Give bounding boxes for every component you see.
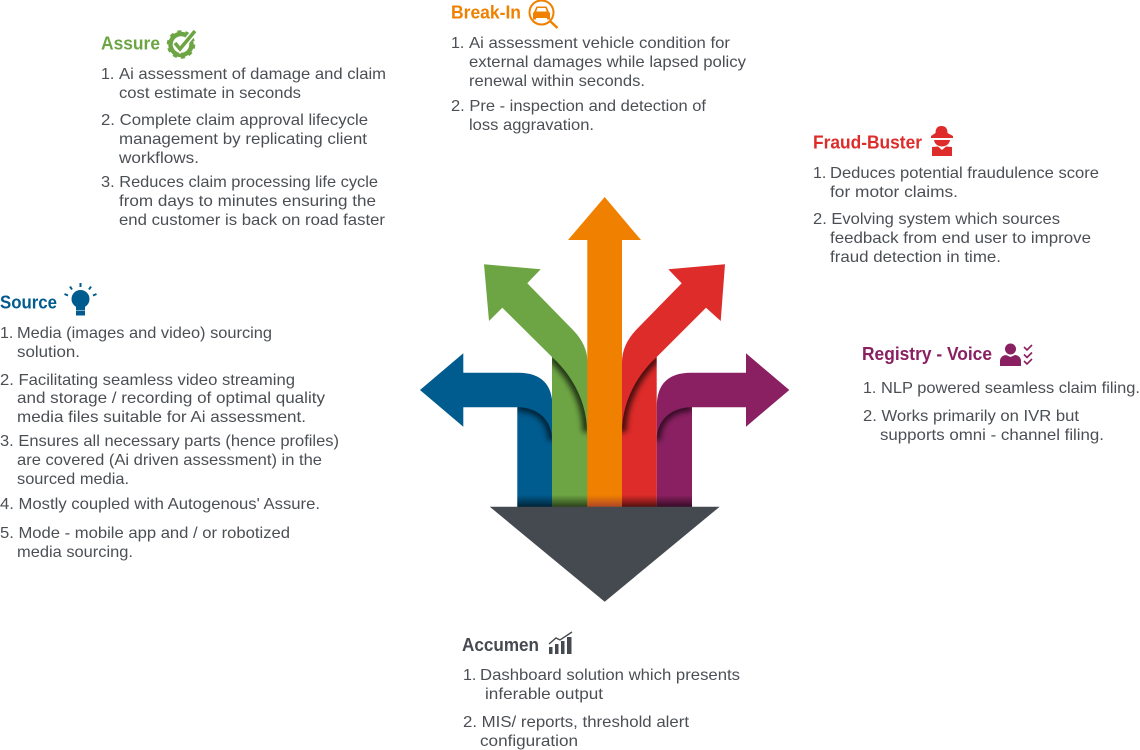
- arrow: orange, up: [568, 197, 641, 507]
- central arrows diagram: [420, 197, 789, 602]
- text block: Accumen list: inferable output: [485, 686, 604, 703]
- text block: Fraud-Buster list: 2. Evolving system which sources: [813, 211, 1060, 228]
- icon: magnifier with car: [530, 0, 558, 28]
- icon: light bulb: [64, 283, 96, 316]
- text block: Fraud-Buster list: feedback from end user to improve: [830, 230, 1091, 247]
- text block: Source list: [0, 325, 339, 561]
- heading: Assure: Assure: [101, 34, 160, 54]
- heading: Accumen: Accumen: [462, 635, 539, 655]
- text block: Break-In list: loss aggravation.: [469, 117, 594, 134]
- text block: Break-In list: renewal within seconds.: [469, 73, 645, 90]
- text block: Break-In list: 1.: [451, 35, 464, 52]
- icon: person with checklist: [1000, 344, 1032, 366]
- text block: Accumen list: [463, 667, 740, 750]
- text block: Source list: are covered (Ai driven assessment) in the: [17, 452, 322, 469]
- text block: Assure list: [101, 66, 386, 229]
- text block: Assure list: Ai assessment of damage and claim: [119, 66, 386, 83]
- text block: Source list: and storage / recording of optimal quality: [17, 390, 325, 407]
- heading: Break-In: Break-In: [451, 2, 521, 22]
- text block: Source list: 5. Mode - mobile app and / or robotized: [0, 525, 290, 542]
- icon: gear with check: [168, 31, 195, 57]
- text block: Break-In list: 2. Pre - inspection and detection of: [451, 98, 707, 115]
- panel: Source: [0, 283, 339, 561]
- text block: Break-In list: Ai assessment vehicle condition for: [469, 35, 731, 52]
- text block: Fraud-Buster list: fraud detection in time.: [830, 249, 1001, 266]
- text block: Accumen list: 1.: [463, 667, 476, 684]
- text block: Registry - Voice list: [863, 380, 1140, 444]
- text block: Fraud-Buster list: for motor claims.: [830, 184, 958, 201]
- text block: Fraud-Buster list: Deduces potential fraudulence score: [830, 165, 1099, 182]
- text block: Source list: 3. Ensures all necessary parts (hence profiles): [0, 433, 339, 450]
- fold shadows: [517, 357, 692, 440]
- text block: Registry - Voice list: NLP powered seamless claim filing.: [881, 380, 1140, 397]
- panel: Fraud-Buster: [813, 126, 1099, 266]
- panel: Accumen: [462, 632, 740, 750]
- text block: Source list: 4. Mostly coupled with Autogenous' Assure.: [0, 496, 320, 513]
- text block: Break-In list: [451, 35, 746, 134]
- text block: Fraud-Buster list: [813, 165, 1099, 266]
- arrow: green, up-left: [484, 264, 588, 507]
- arrow: purple, right: [657, 353, 789, 507]
- heading: Registry - Voice: Registry - Voice: [862, 344, 992, 364]
- text block: Break-In list: external damages while lapsed policy: [469, 54, 746, 71]
- base shading: [517, 495, 692, 507]
- text block: Assure list: 1.: [101, 66, 114, 83]
- panel: Registry - Voice: [862, 344, 1140, 444]
- text block: Registry - Voice list: 2. Works primarily on IVR but: [863, 408, 1080, 425]
- panel: Break-In: [451, 0, 746, 134]
- text block: Source list: 1.: [0, 325, 13, 342]
- base triangle: [490, 507, 720, 602]
- text block: Assure list: cost estimate in seconds: [119, 85, 301, 102]
- text block: Accumen list: configuration: [480, 733, 578, 750]
- text block: Source list: sourced media.: [17, 471, 129, 488]
- text block: Assure list: 2. Complete claim approval lifecycle: [101, 112, 368, 129]
- heading: Source: Source: [0, 292, 57, 312]
- text block: Assure list: 3. Reduces claim processing life cycle: [101, 174, 378, 191]
- arrow: red, up-right: [622, 264, 725, 507]
- heading: Fraud-Buster: Fraud-Buster: [813, 132, 922, 152]
- arrow: blue, left: [420, 353, 552, 507]
- text block: Source list: media sourcing.: [17, 544, 133, 561]
- text block: Assure list: end customer is back on road faster: [119, 212, 386, 229]
- text block: Fraud-Buster list: 1.: [813, 165, 826, 182]
- icon: detective: [931, 126, 953, 156]
- text block: Source list: 2. Facilitating seamless video streaming: [0, 372, 295, 389]
- text block: Source list: media files suitable for Ai assessment.: [17, 409, 306, 426]
- icon: rising bar chart: [549, 632, 572, 654]
- text block: Assure list: from days to minutes ensuring the: [119, 193, 376, 210]
- text block: Assure list: workflows.: [118, 150, 199, 167]
- text block: Source list: solution.: [17, 344, 80, 361]
- text block: Accumen list: Dashboard solution which presents: [480, 667, 740, 684]
- text block: Assure list: management by replicating client: [119, 131, 368, 148]
- text block: Source list: Media (images and video) sourcing: [17, 325, 272, 342]
- text block: Registry - Voice list: supports omni - channel filing.: [880, 427, 1104, 444]
- panel: Assure: [101, 31, 386, 229]
- text block: Accumen list: 2. MIS/ reports, threshold alert: [463, 714, 690, 731]
- text block: Registry - Voice list: 1.: [863, 380, 876, 397]
